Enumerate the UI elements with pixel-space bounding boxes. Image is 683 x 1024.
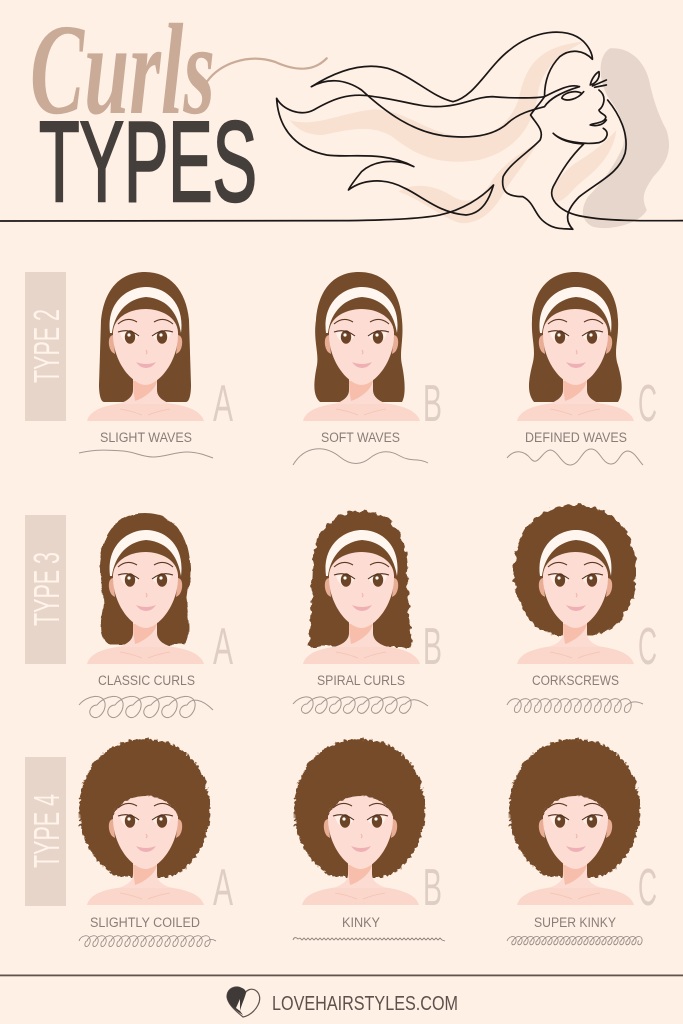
figure: Type 4A slightly coiled: A xyxy=(213,859,233,917)
section band: Type 3: TYPE 3 xyxy=(26,552,67,626)
figure: Type 2A slight waves: A xyxy=(213,375,233,433)
footer divider xyxy=(0,974,683,976)
figure: Type 2C defined waves xyxy=(507,272,657,465)
figure: Type 3B spiral curls: B xyxy=(423,618,442,676)
figure: Type 4C super kinky xyxy=(507,739,657,945)
header illustration: line art woman with flowing hair xyxy=(0,32,683,229)
figure: Type 3C corkscrews xyxy=(507,505,657,713)
peach hair streams xyxy=(290,42,616,223)
swash of the title lettering xyxy=(207,58,327,82)
section band: Type 4: TYPE 4 xyxy=(26,794,67,868)
section band: Type 2: TYPE 2 xyxy=(26,309,67,383)
figure: Type 3A classic curls xyxy=(79,513,233,718)
section band: Type 4 xyxy=(25,757,67,906)
section band: Type 3 xyxy=(25,515,67,664)
beige blob behind profile xyxy=(583,48,669,228)
figure: Type 4A slightly coiled xyxy=(79,739,233,947)
figure: Type 2B soft waves: SOFT WAVES xyxy=(321,430,400,445)
figure: Type 2A slight waves xyxy=(79,272,233,458)
figure: Type 3C corkscrews: CORKSCREWS xyxy=(532,673,619,688)
figure: Type 3B spiral curls: SPIRAL CURLS xyxy=(317,673,405,688)
figure: Type 3B spiral curls xyxy=(293,511,442,713)
figure: Type 2B soft waves xyxy=(293,272,442,465)
figure: Type 4A slightly coiled: SLIGHTLY COILED xyxy=(90,915,200,930)
figure: Type 4C super kinky: C xyxy=(638,859,657,917)
title: TYPES: TYPES xyxy=(39,99,257,226)
figure: Type 4C super kinky: SUPER KINKY xyxy=(534,915,616,930)
figure: Type 2A slight waves: SLIGHT WAVES xyxy=(100,430,192,445)
footer logo: heart with hair xyxy=(227,987,260,1017)
footer site name: LOVEHAIRSTYLES.COM xyxy=(272,993,458,1015)
figure: Type 2C defined waves: DEFINED WAVES xyxy=(525,430,627,445)
title: Curls: Curls xyxy=(30,0,215,142)
figure: Type 2B soft waves: B xyxy=(423,375,442,433)
figure: Type 3A classic curls: CLASSIC CURLS xyxy=(98,673,195,688)
figure: Type 2C defined waves: C xyxy=(638,375,657,433)
figure: Type 4B kinky: B xyxy=(423,859,442,917)
figure: Type 4B kinky xyxy=(293,739,445,941)
figure: Type 3A classic curls: A xyxy=(213,618,233,676)
section band: Type 2 xyxy=(25,272,67,421)
black continuous line drawing xyxy=(0,32,683,229)
figure: Type 3C corkscrews: C xyxy=(638,618,657,676)
figure: Type 4B kinky: KINKY xyxy=(342,915,380,930)
